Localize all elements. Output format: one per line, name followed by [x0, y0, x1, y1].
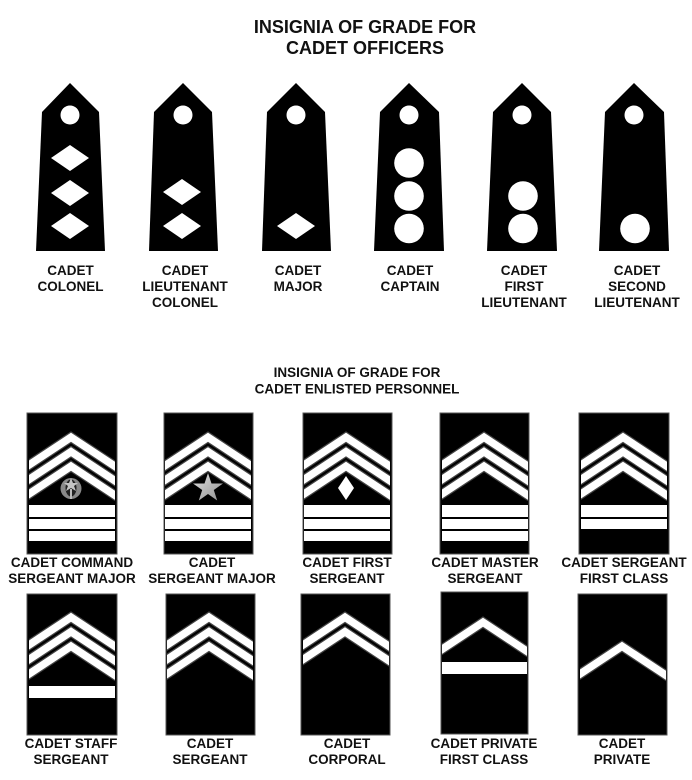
label: cadet master sergeant: CADET MASTER [431, 555, 539, 570]
label: cadet first lieutenant: LIEUTENANT [481, 295, 567, 310]
title: cadet enlisted personnel: CADET ENLISTED PERSONNEL [255, 382, 459, 396]
label: cadet private: PRIVATE [594, 752, 650, 767]
label: cadet lieutenant colonel: LIEUTENANT [142, 279, 228, 294]
label: cadet command sergeant major: SERGEANT MAJOR [8, 571, 136, 586]
label: cadet master sergeant: SERGEANT [447, 571, 523, 586]
label: cadet staff sergeant: CADET STAFF [25, 736, 117, 751]
label: cadet captain: CADET [387, 263, 434, 278]
label: cadet lieutenant colonel: CADET [162, 263, 209, 278]
label: cadet corporal: CADET [324, 736, 371, 751]
insignia: cadet private [574, 594, 670, 735]
insignia: cadet private first class [435, 592, 531, 734]
label: cadet major [274, 263, 323, 294]
label: cadet colonel [38, 263, 104, 294]
label: cadet private first class [431, 736, 537, 767]
label: cadet lieutenant colonel: COLONEL [152, 295, 218, 310]
label: cadet sergeant first class: FIRST CLASS [580, 571, 668, 586]
label: cadet master sergeant [431, 555, 539, 586]
insignia: cadet lieutenant colonel [149, 83, 218, 251]
label: cadet sergeant major [148, 555, 276, 586]
insignia: cadet sergeant [161, 594, 257, 735]
label: cadet first lieutenant [481, 263, 567, 310]
label: cadet private [594, 736, 650, 767]
label: cadet first sergeant: CADET FIRST [302, 555, 392, 570]
insignia: cadet second lieutenant [599, 83, 669, 251]
insignia: cadet major [262, 83, 331, 251]
title: cadet officers [254, 17, 476, 58]
title: cadet officers: CADET OFFICERS [286, 38, 444, 58]
icon: silver star [193, 473, 223, 500]
label: cadet private first class: FIRST CLASS [440, 752, 528, 767]
label: cadet command sergeant major: CADET COMMAND [11, 555, 133, 570]
label: cadet colonel: COLONEL [38, 279, 104, 294]
insignia: cadet staff sergeant [23, 594, 119, 735]
label: cadet first sergeant [302, 555, 392, 586]
label: cadet sergeant: SERGEANT [172, 752, 248, 767]
insignia: cadet captain [374, 83, 444, 251]
label: cadet staff sergeant: SERGEANT [33, 752, 109, 767]
insignia: cadet first sergeant [298, 413, 394, 554]
label: cadet sergeant major: SERGEANT MAJOR [148, 571, 276, 586]
label: cadet captain: CAPTAIN [380, 279, 440, 294]
label: cadet sergeant [172, 736, 248, 767]
label: cadet command sergeant major [8, 555, 136, 586]
title: cadet officers: INSIGNIA OF GRADE FOR [254, 17, 476, 37]
label: cadet sergeant first class [561, 555, 687, 586]
label: cadet lieutenant colonel [142, 263, 228, 310]
label: cadet major: MAJOR [274, 279, 323, 294]
label: cadet captain [380, 263, 440, 294]
label: cadet sergeant first class: CADET SERGEANT [561, 555, 687, 570]
insignia: cadet first lieutenant [487, 83, 557, 251]
label: cadet second lieutenant: CADET [614, 263, 661, 278]
label: cadet second lieutenant: LIEUTENANT [594, 295, 680, 310]
title: cadet enlisted personnel: INSIGNIA OF GRADE FOR [274, 365, 441, 380]
label: cadet colonel: CADET [47, 263, 95, 278]
label: cadet first sergeant: SERGEANT [309, 571, 385, 586]
insignia: cadet corporal [297, 594, 393, 735]
insignia: cadet colonel [36, 83, 105, 251]
label: cadet major: CADET [275, 263, 322, 278]
insignia: cadet master sergeant [436, 413, 532, 554]
label: cadet private: CADET [599, 736, 646, 751]
icon: diamond [338, 476, 354, 500]
icon: wreath and star emblem [60, 478, 82, 499]
label: cadet first lieutenant: CADET [501, 263, 548, 278]
label: cadet second lieutenant [594, 263, 680, 310]
label: cadet sergeant: CADET [187, 736, 234, 751]
label: cadet second lieutenant: SECOND [608, 279, 666, 294]
insignia: cadet sergeant first class [575, 413, 671, 554]
label: cadet corporal [308, 736, 386, 767]
title: cadet enlisted personnel [255, 365, 459, 396]
label: cadet staff sergeant [25, 736, 117, 767]
label: cadet sergeant major: CADET [189, 555, 236, 570]
label: cadet corporal: CORPORAL [308, 752, 386, 767]
insignia: cadet sergeant major [160, 413, 256, 554]
insignia: cadet command sergeant major [23, 413, 119, 554]
label: cadet private first class: CADET PRIVATE [431, 736, 537, 751]
label: cadet first lieutenant: FIRST [504, 279, 544, 294]
